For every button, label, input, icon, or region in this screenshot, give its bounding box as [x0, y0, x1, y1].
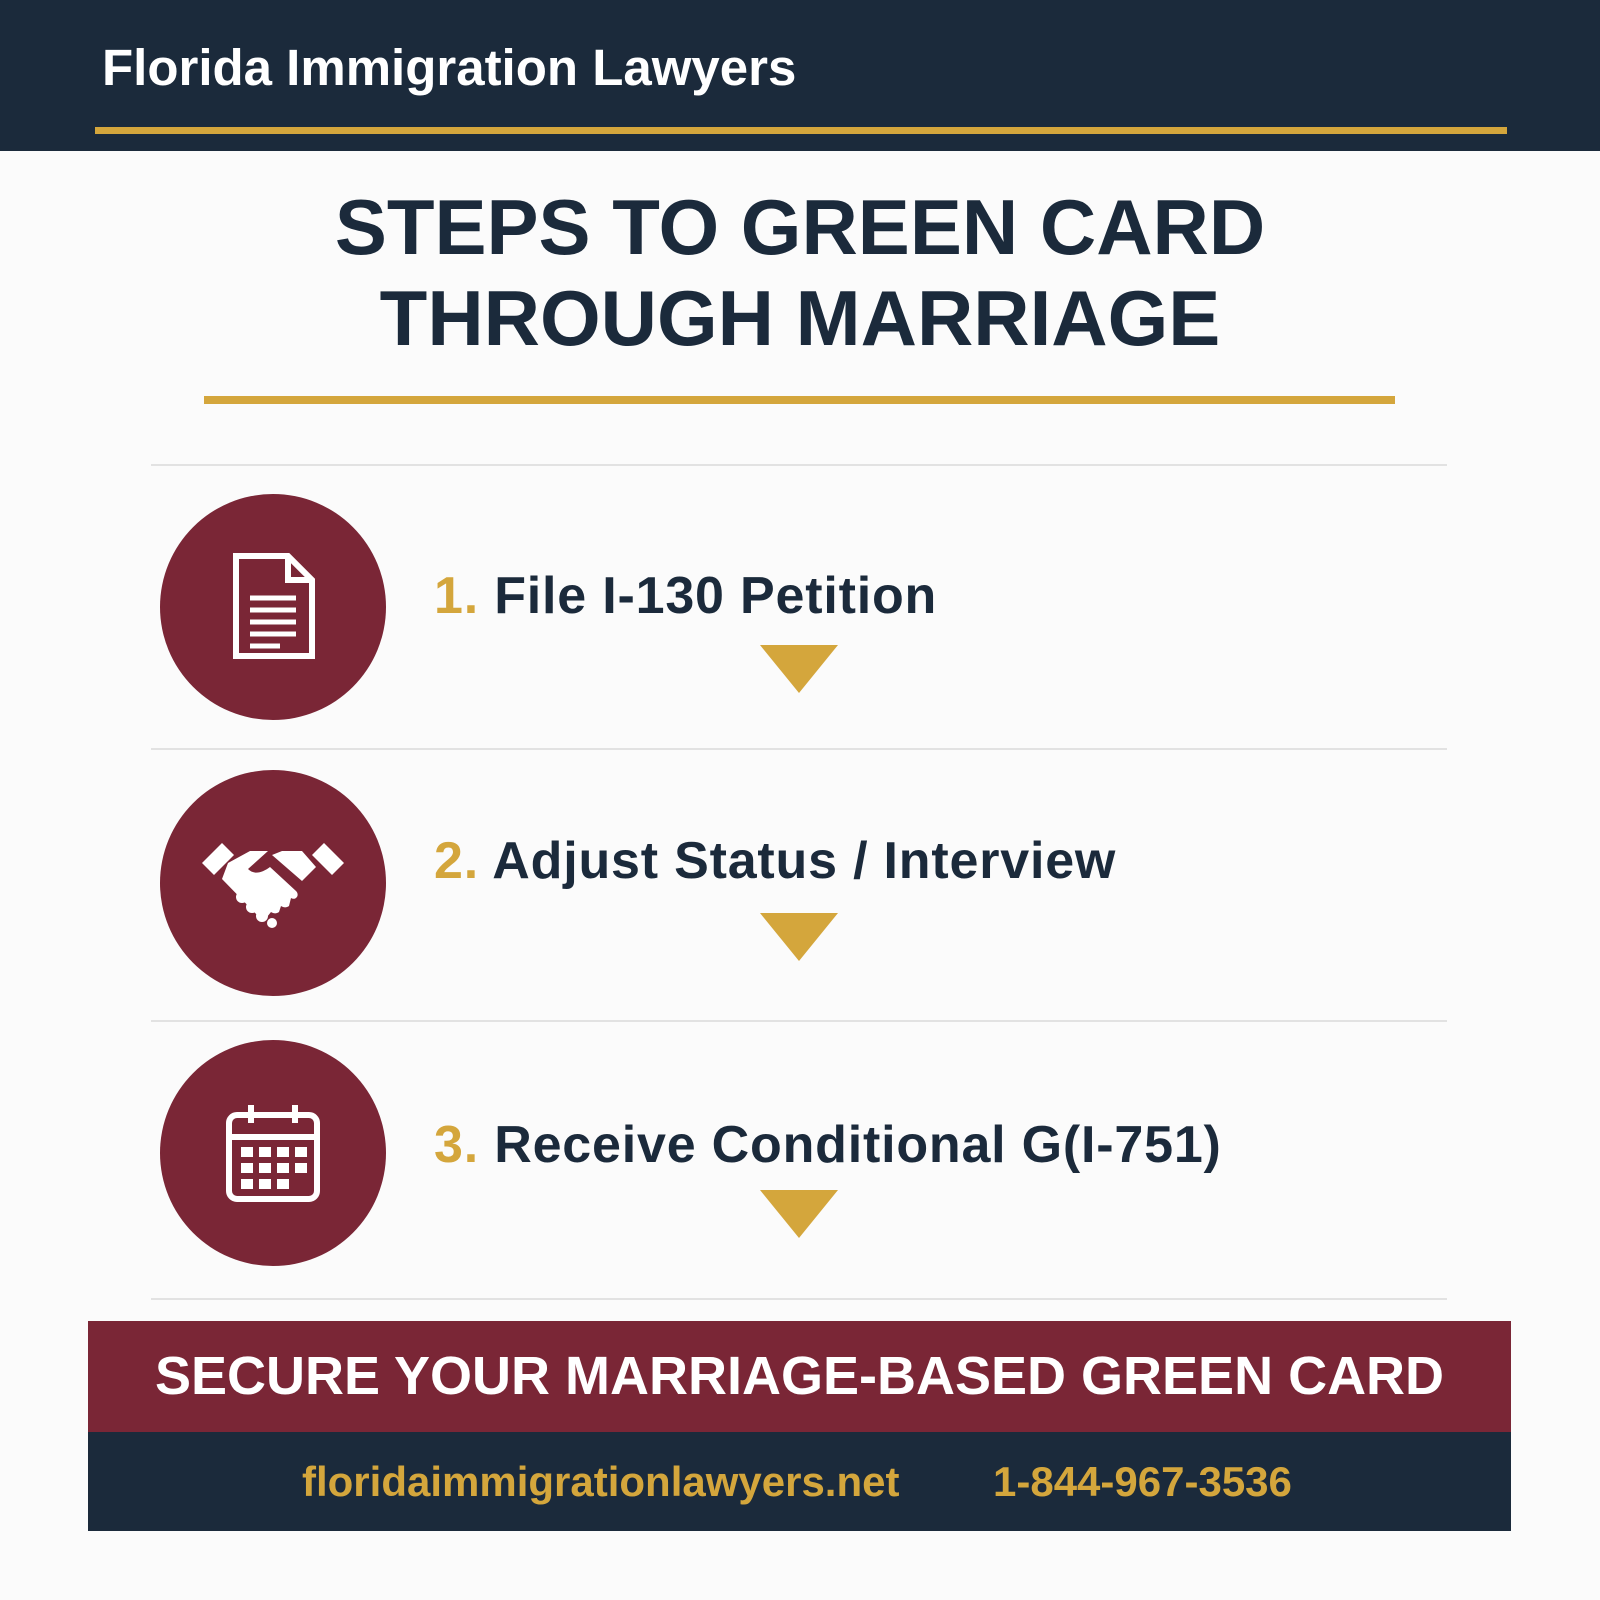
- main title: THROUGH MARRIAGE: [380, 274, 1220, 362]
- icon: document: [160, 494, 386, 720]
- icon: handshake: [160, 770, 386, 996]
- step 1: [160, 494, 937, 720]
- contact bar: [88, 1432, 1511, 1531]
- step 2 text: 2. Adjust Status / Interview: [434, 832, 1116, 890]
- step 1 text: 1. File I-130 Petition: [434, 567, 937, 625]
- main title: STEPS TO GREEN CARD: [335, 183, 1265, 271]
- CTA banner: SECURE YOUR MARRIAGE-BASED GREEN CARD: [155, 1346, 1444, 1406]
- arrow: [760, 1190, 838, 1238]
- icon: calendar: [160, 1040, 386, 1266]
- step 3 text: 3. Receive Conditional G(I-751): [434, 1116, 1222, 1174]
- header bar: [0, 0, 1600, 151]
- arrow: [760, 645, 838, 693]
- step 2: [160, 770, 1116, 996]
- CTA banner: [88, 1321, 1511, 1432]
- website: floridaimmigrationlawyers.net: [302, 1458, 899, 1505]
- title gold underline: [204, 396, 1395, 404]
- header title: Florida Immigration Lawyers: [102, 39, 796, 96]
- step 3: [160, 1040, 1222, 1266]
- phone: 1-844-967-3536: [993, 1458, 1292, 1505]
- arrow: [760, 913, 838, 961]
- main title: [335, 183, 1265, 362]
- header gold rule: [95, 127, 1507, 134]
